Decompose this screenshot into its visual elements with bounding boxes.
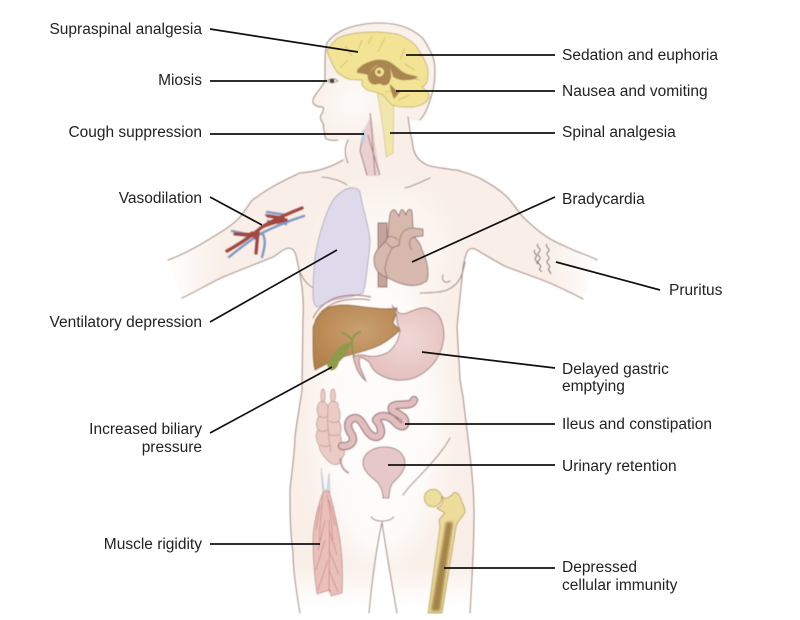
icon: neck vessels and trachea [360, 113, 380, 176]
icon: pruritus squiggles [534, 244, 551, 274]
label: Delayed gastric emptying: Delayed gastric [562, 361, 669, 378]
label: Bradycardia: Bradycardia [562, 191, 645, 208]
label: Ventilatory depression [49, 250, 337, 331]
icon: lung [313, 188, 370, 307]
body illustration [168, 23, 597, 615]
label: Muscle rigidity: Muscle rigidity [104, 536, 202, 553]
label: Delayed gastric emptying [422, 352, 669, 395]
icon: bladder [363, 447, 405, 498]
icon: femur [424, 489, 465, 613]
label: Cough suppression: Cough suppression [68, 124, 202, 141]
label: Supraspinal analgesia [49, 21, 358, 52]
icon: small intestine [342, 400, 414, 446]
label: Sedation and euphoria: Sedation and euphoria [562, 47, 718, 64]
label: Miosis: Miosis [158, 72, 202, 89]
label: Delayed gastric emptying: emptying [562, 378, 625, 395]
icon: arm blood vessels [227, 208, 304, 257]
label: Depressed cellular immunity: cellular immunity [562, 577, 678, 594]
label: Spinal analgesia: Spinal analgesia [562, 124, 676, 141]
body outline [168, 23, 597, 613]
icon: diaphragm [313, 295, 371, 321]
icon: muscle [313, 468, 342, 596]
icon: heart [374, 209, 428, 287]
label: Bradycardia [412, 191, 645, 262]
label: Ileus and constipation: Ileus and constipation [562, 416, 712, 433]
label: Increased biliary pressure: Increased biliary [89, 421, 202, 438]
label: Ventilatory depression: Ventilatory depression [49, 314, 202, 331]
label: Increased biliary pressure [89, 367, 332, 456]
label: Nausea and vomiting: Nausea and vomiting [562, 83, 708, 100]
label: Increased biliary pressure: pressure [142, 439, 202, 456]
label: Vasodilation: Vasodilation [119, 190, 202, 207]
label: Supraspinal analgesia: Supraspinal analgesia [49, 21, 202, 38]
label: Urinary retention: Urinary retention [562, 458, 677, 475]
icon: liver and gallbladder [313, 305, 400, 372]
icon: spinal cord [377, 92, 394, 157]
label: Vasodilation [119, 190, 262, 225]
icon: brain [327, 32, 429, 107]
icon: stomach [353, 305, 444, 381]
label: Pruritus: Pruritus [669, 282, 723, 299]
label: Depressed cellular immunity [444, 559, 678, 594]
label: Depressed cellular immunity: Depressed [562, 559, 637, 576]
icon: colon [316, 389, 349, 473]
label: Pruritus [556, 262, 723, 299]
body silhouette [168, 23, 597, 615]
